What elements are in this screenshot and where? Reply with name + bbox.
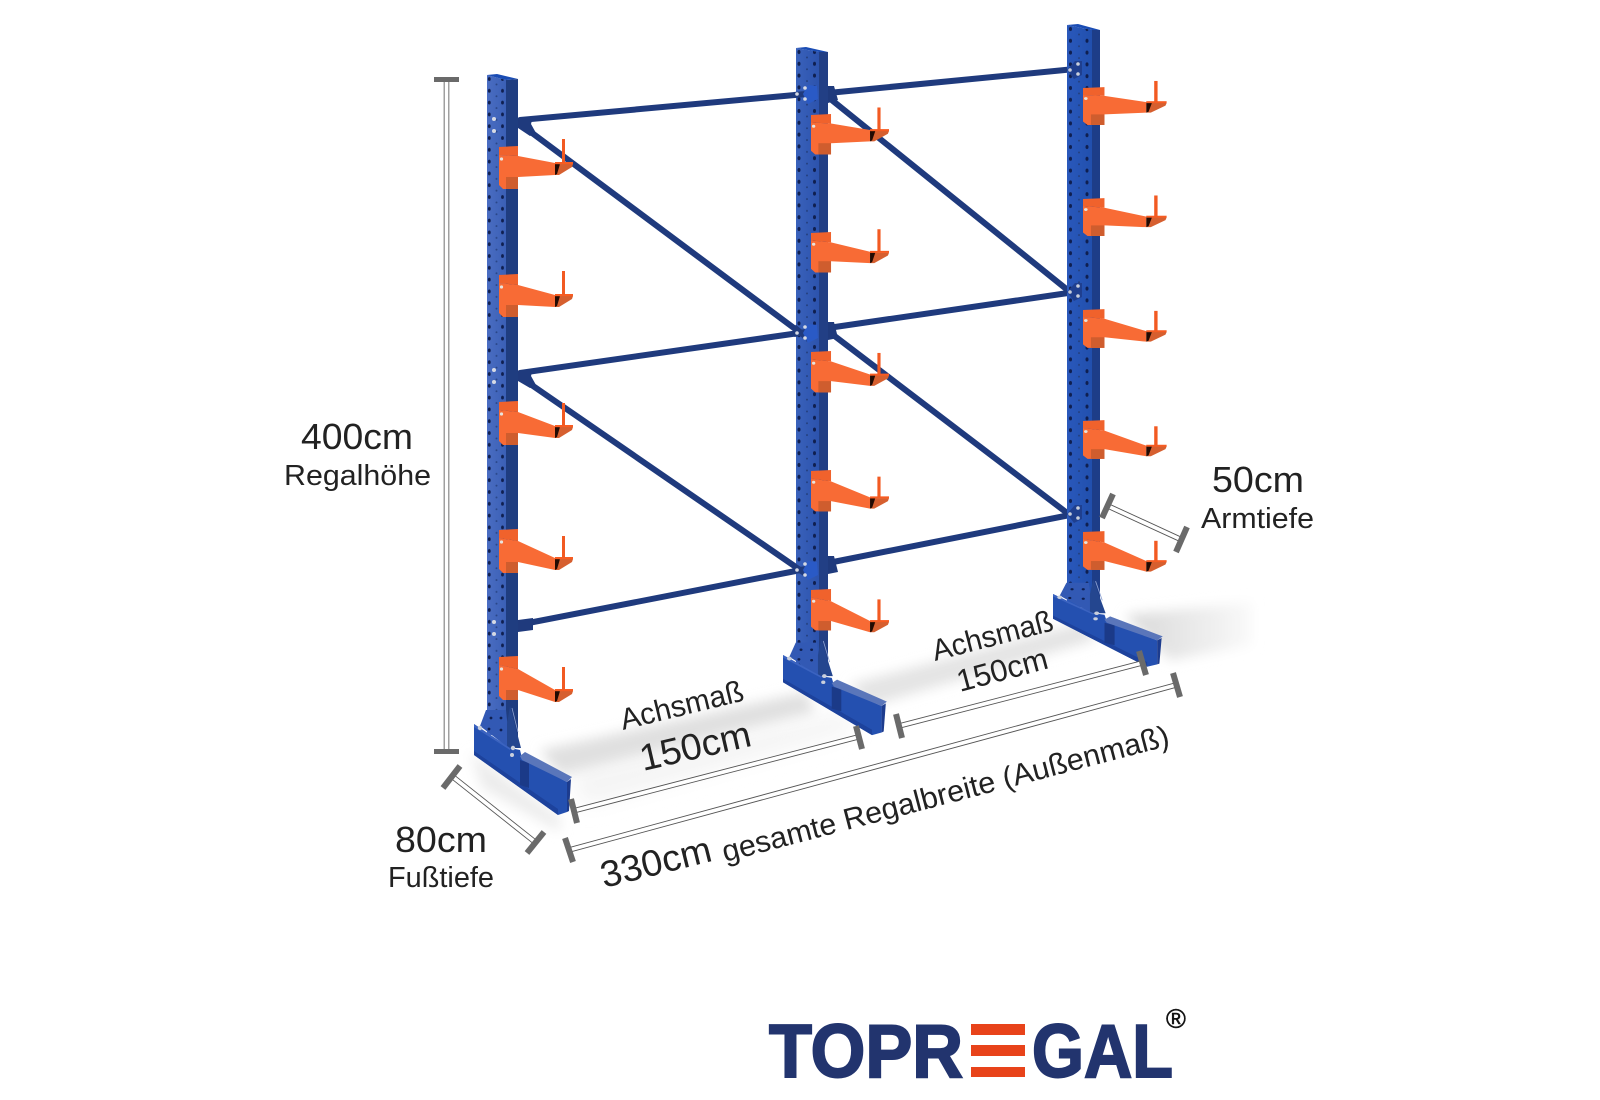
dimension: axis 150cm left: [571, 726, 862, 823]
label: Achsmaß 150cm right: [928, 605, 1057, 699]
logo: TOPREGAL: ®: [1166, 1004, 1186, 1034]
label: 80cm Fußtiefe: 80cm: [395, 819, 487, 860]
logo: TOPREGAL: TOPR: [769, 1009, 963, 1093]
column 2 feet and upright: [783, 47, 887, 735]
label: 400cm Regalhöhe: Regalhöhe: [284, 460, 431, 492]
dimension: total width 330cm: [565, 673, 1180, 862]
orange arms column 1: [499, 139, 573, 702]
label: Achsmaß 150cm right: 150cm: [953, 641, 1052, 699]
label: 330cm gesamte Regalbreite (Außenmaß): 330cm: [596, 829, 716, 896]
label: Achsmaß 150cm left: [617, 675, 755, 779]
label: Achsmaß 150cm left: 150cm: [636, 713, 755, 779]
logo: TOPREGAL: [769, 1004, 1186, 1093]
rods: horizontal and diagonal braces: [518, 69, 1075, 625]
label: 80cm Fußtiefe: Fußtiefe: [388, 862, 494, 894]
label: 50cm Armtiefe: 50cm: [1212, 459, 1304, 500]
column 1 feet and upright: [474, 74, 572, 815]
label: 400cm Regalhöhe: [284, 416, 431, 492]
label: Achsmaß 150cm right: Achsmaß: [928, 605, 1057, 668]
dimension: arm depth 50cm: [1102, 494, 1187, 552]
label: Achsmaß 150cm left: Achsmaß: [617, 675, 747, 737]
label: 50cm Armtiefe: [1201, 459, 1314, 535]
orange arms column 2: [811, 107, 889, 632]
label: 330cm gesamte Regalbreite (Außenmaß): [596, 720, 1173, 896]
floor shadows: [470, 602, 1252, 832]
dimension: foot depth 80cm: [443, 766, 544, 853]
label: 50cm Armtiefe: Armtiefe: [1201, 503, 1314, 535]
orange arms column 3: [1083, 81, 1167, 572]
dimension: axis 150cm right: [896, 651, 1146, 738]
column 3 feet and upright: [1053, 24, 1163, 667]
label: 400cm Regalhöhe: 400cm: [301, 416, 413, 457]
label: 80cm Fußtiefe: [388, 819, 494, 894]
label: 330cm gesamte Regalbreite (Außenmaß): gesamte Regalbreite (Außenmaß): [718, 720, 1173, 869]
dimension: height 400cm: [434, 77, 459, 754]
logo: TOPREGAL: GAL: [1032, 1009, 1173, 1093]
